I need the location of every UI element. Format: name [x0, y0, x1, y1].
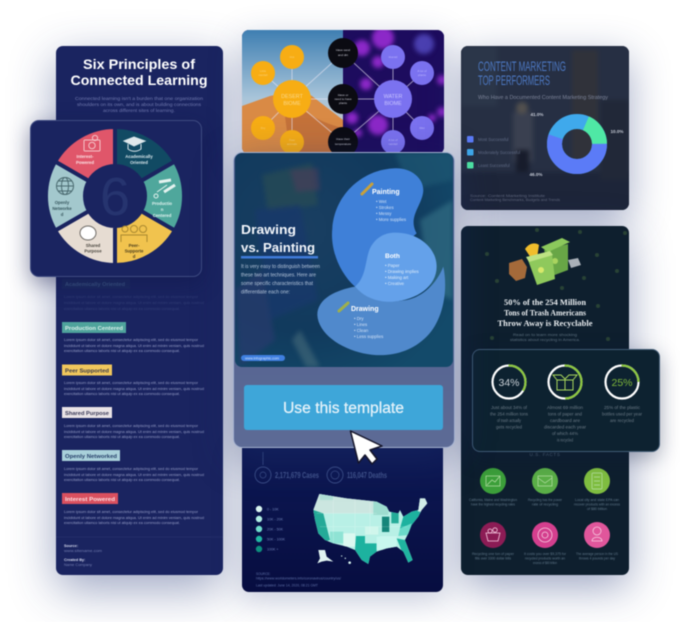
venn shape: painting — [331, 168, 423, 286]
section: shared purpose: Shared Purpose — [65, 411, 109, 417]
stat captions — [490, 404, 642, 442]
stat ring: box icon — [548, 365, 581, 398]
background: paint brushes photo — [234, 152, 452, 366]
panel: template preview with call to action — [233, 152, 455, 448]
yellow item — [525, 243, 539, 258]
stat captions: cardboard are — [550, 418, 580, 422]
diagram: water biome: BIOME — [384, 101, 402, 107]
donut chart — [529, 112, 624, 177]
diagram: shared traits: temperature — [335, 142, 351, 146]
captions: pink facts: Recycling one ton of paper — [472, 552, 515, 556]
background: jellyfish photo — [343, 27, 447, 154]
text block: intro: It is very easy to distinguish between — [240, 264, 320, 270]
text block: painting list: • Messy — [376, 210, 392, 216]
panel: covid map infographic — [242, 440, 443, 592]
metal tray — [568, 258, 581, 268]
segment labels: Academically — [125, 154, 153, 158]
background: desert photo — [242, 30, 343, 154]
source note: https://www.worldometers.info/coronavirus/country/us/ — [256, 576, 341, 580]
decorative recycle marks — [485, 228, 627, 341]
diagram: desert biome: BIOME — [283, 101, 301, 107]
segment icons — [56, 135, 174, 242]
diagram: water biome: A lot of — [388, 138, 398, 142]
icon: mouse cursor — [349, 430, 384, 465]
source note: Source: Content Marketing Institute — [470, 194, 545, 198]
legend — [467, 136, 520, 168]
section: shared purpose: incididunt ut labore et dolore magna aliqua. Ut enim ad minim veniam, quis nostrud — [64, 430, 204, 434]
text block: drawing list: Drawing — [350, 306, 378, 312]
stat captions: Just about 34% of — [490, 404, 527, 410]
heading: content marketing: CONTENT MARKETING — [478, 58, 566, 74]
section: academically oriented: incididunt ut labore et dolore magna aliqua. Ut enim ad minim veniam, quis nostrud — [64, 301, 204, 305]
segment labels: Oriented — [130, 160, 148, 164]
heading: content marketing: TOP PERFORMERS — [478, 72, 550, 88]
captions: pink facts — [472, 552, 619, 565]
text block: painting list — [372, 188, 406, 222]
captions: green facts: Local city and state EPA can — [575, 498, 619, 502]
captions: pink facts: throws 4 pounds per day — [579, 556, 615, 560]
captions: green facts: California, Maine and Washington — [469, 498, 517, 502]
text block: painting list: Painting — [372, 188, 399, 196]
panel: content marketing top performers — [461, 46, 629, 210]
captions: pink facts: excess of $80 billion — [533, 561, 557, 565]
legend: case ranges: 50K - 100K — [267, 538, 286, 542]
donut chart: 41.0% — [530, 112, 544, 117]
stat captions: discarded each year — [544, 424, 586, 429]
stat ring: 25 percent: 25% — [611, 376, 632, 388]
donut chart: 10.0% — [610, 129, 624, 134]
stat captions: 25% of the plastic — [604, 404, 640, 410]
text block: intro: some specific characteristics that — [240, 280, 313, 286]
section: peer supported — [62, 364, 204, 396]
button: use this template — [244, 384, 442, 430]
diagram: water biome: A lot of — [417, 69, 427, 73]
panel: six principles wheel popup — [30, 120, 202, 277]
section: production centered: Production Centered — [65, 326, 123, 332]
text block: painting list: • Wet — [376, 198, 387, 204]
stat captions: the 254 million tons — [490, 411, 528, 416]
stat captions: bottles used per year — [602, 411, 642, 416]
icon row: pink facts — [480, 522, 610, 548]
diagram connectors — [263, 53, 422, 142]
diagram: water biome: WATER — [384, 94, 403, 100]
subtitle: Who Have a Documented Content Marketing Strategy — [478, 95, 608, 101]
segment: openly networked — [45, 161, 88, 230]
diagram: desert biome: Little — [260, 69, 266, 73]
text block: intro — [240, 264, 320, 295]
section: shared purpose: exercitation ullamco laboris nisi ut aliquip ex ea commodo consequat. — [64, 435, 180, 439]
heading: content marketing — [478, 58, 566, 88]
text block: intro — [75, 96, 203, 113]
subtitle: statistics about recycling in America. — [510, 338, 580, 342]
panel: recycling infographic — [461, 226, 629, 575]
source note — [470, 194, 560, 202]
diagram: shared traits: and dirt — [338, 53, 348, 57]
numeral: six: 6 — [99, 166, 130, 226]
source note: Last updated: June 14, 2020, 08:21 GMT — [256, 584, 318, 588]
segment: peer supported — [114, 210, 174, 264]
segment labels: n — [160, 206, 163, 212]
stat: deaths: 116,047 Deaths — [347, 471, 387, 480]
captions: green facts: rate of recycling — [532, 502, 558, 506]
captions: pink facts: It costs you over $9,375 for — [524, 552, 567, 556]
captions: green facts: Recycling has the power — [528, 498, 563, 502]
section: openly networked: incididunt ut labore et dolore magna aliqua. Ut enim ad minim veniam, quis nostrud — [64, 473, 204, 477]
panel: six principles infographic — [56, 46, 223, 575]
stat captions: are recycled — [610, 418, 634, 422]
venn shape: both — [354, 232, 436, 301]
section: interest powered: Interest Powered — [65, 497, 115, 503]
text block: intro: shoulders on its own, and is about building connections — [77, 102, 202, 107]
diagram: water biome: rainfall — [389, 142, 398, 146]
section: interest powered: Lorem ipsum dolor sit amet, consectetur adipiscing elit, sed do eiusmod tempor — [64, 510, 199, 514]
captions: green facts — [469, 498, 620, 511]
stat captions: Almost 69 million — [546, 404, 583, 410]
panel: recycling stats popup — [472, 349, 660, 452]
heading: drawing vs painting — [240, 222, 315, 254]
diagram: shared traits: plants — [339, 101, 347, 105]
diagram: desert biome: rainfall — [259, 73, 268, 77]
text block: both list: • Paper — [384, 262, 400, 268]
text block: both list — [384, 252, 419, 286]
captions: pink facts: fills over 3300 dollar bills — [475, 556, 511, 560]
segment labels: Productio — [151, 200, 172, 206]
section: shared purpose: Lorem ipsum dolor sit amet, consectetur adipiscing elit, sed do eiusmod tempor — [64, 424, 199, 428]
panel: biome comparison — [242, 30, 444, 154]
heading: six principles — [70, 56, 208, 88]
diagram: desert biome: animals — [287, 142, 298, 146]
segment: interest powered — [55, 126, 114, 180]
source note: Content Marketing Benchmarks, Budgets and Trends — [470, 198, 560, 202]
section: production centered — [62, 322, 204, 353]
section: production centered: exercitation ullamco laboris nisi ut aliquip ex ea commodo consequat. — [64, 349, 180, 353]
captions: pink facts: recycled products worth an — [525, 556, 565, 560]
section: academically oriented — [62, 279, 204, 311]
segment labels: Interest- — [76, 154, 94, 158]
segment labels: Openly — [54, 200, 69, 204]
text block: source and credits: www.sitename.com — [64, 549, 102, 553]
text block: drawing list — [350, 306, 384, 338]
diagram: desert biome: Dry — [261, 126, 266, 130]
text block: both list: • Creative — [384, 280, 404, 286]
donut chart: 46.0% — [529, 172, 543, 177]
heading: recycling: 50% of the 254 Million — [504, 297, 586, 307]
segment labels — [52, 154, 172, 258]
section: openly networked — [62, 450, 204, 482]
section: openly networked: Openly Networked — [65, 454, 117, 460]
background: office photo — [455, 40, 635, 215]
text block: intro: Connected learning isn't a burden that one organization — [75, 96, 203, 101]
stat captions: of trash actually — [496, 418, 521, 422]
text block: intro: differentiate each one: — [240, 289, 290, 295]
section: interest powered: incididunt ut labore et dolore magna aliqua. Ut enim ad minim veniam, quis nostrud — [64, 516, 204, 520]
section: peer supported: Peer Supported — [65, 368, 109, 374]
text block: both list: • Making art — [384, 274, 409, 280]
icon row: green facts — [480, 468, 610, 494]
section: academically oriented: Academically Oriented — [65, 282, 125, 288]
wheel chart — [45, 126, 184, 264]
illustration: recycling bins — [509, 238, 581, 285]
heading: six principles: Six Principles of — [83, 56, 195, 72]
segment labels: d — [132, 254, 135, 258]
segment labels: Networke — [52, 206, 72, 210]
segment labels: Peer- — [128, 242, 139, 248]
text block: drawing list: • Clean — [354, 328, 368, 332]
diagram: water biome — [374, 45, 434, 154]
diagram: desert biome: Hot — [290, 55, 294, 59]
text block: drawing list: • Dry — [354, 316, 364, 320]
captions: pink facts: The average person in the US — [576, 552, 619, 556]
stat captions: gets recycled — [496, 424, 522, 429]
stat captions: is recycled — [556, 437, 573, 442]
segment: academically oriented — [114, 126, 174, 180]
section: openly networked: Lorem ipsum dolor sit amet, consectetur adipiscing elit, sed do eiusmod tempor — [64, 467, 199, 471]
section: openly networked: exercitation ullamco laboris nisi ut aliquip ex ea commodo consequat. — [64, 478, 180, 482]
badge: site link — [240, 354, 284, 360]
segment labels: Purpose — [84, 248, 102, 253]
section: peer supported: exercitation ullamco laboris nisi ut aliquip ex ea commodo consequat. — [64, 392, 180, 396]
diagram: shared traits: Have sand — [336, 48, 351, 52]
stat: deaths — [327, 467, 387, 483]
section: interest powered — [62, 493, 204, 525]
stat: cases: 2,171,679 Cases — [275, 471, 319, 480]
legend: case ranges — [256, 506, 286, 552]
captions: green facts: recover products with an excess — [574, 502, 620, 506]
diagram: water biome: Humid — [389, 55, 398, 59]
segment labels: Shared — [85, 242, 100, 248]
heading: drawing vs painting: Drawing — [240, 222, 296, 236]
text block: both list: • Drawing implies — [384, 268, 419, 274]
segment labels: d — [60, 212, 63, 216]
diagram: shared traits: Have or — [338, 93, 348, 97]
subtitle: Read on to learn more shocking — [513, 333, 577, 337]
text block: source and credits: Name Company — [64, 563, 92, 567]
text block: intro: these two art techniques. Here are — [240, 272, 316, 278]
text block: drawing list: • Less supplies — [354, 334, 384, 338]
legend: Most Successful — [478, 137, 509, 142]
stat captions: tons of paper and — [548, 411, 582, 416]
stat ring: 34 percent: 34% — [498, 376, 519, 388]
diagram: desert biome — [251, 45, 311, 154]
legend: case ranges: 20K - 50K — [267, 528, 284, 532]
heading: facts: U.S. FACTS — [529, 452, 561, 457]
section: production centered: incididunt ut labore et dolore magna aliqua. Ut enim ad minim veniam, quis nostrud — [64, 344, 204, 348]
heading: recycling: Throw Away is Recyclable — [498, 318, 593, 328]
diagram: shared traits — [328, 38, 358, 157]
legend: case ranges: 10K - 20K — [267, 518, 284, 522]
captions: green facts: have the highest recycling rates — [471, 502, 515, 506]
badge: site link: www.infographic.com — [244, 356, 278, 360]
stat ring: 25 percent — [605, 365, 638, 398]
icon: pencil — [338, 302, 348, 310]
heading: recycling: Tons of Trash Americans — [504, 308, 587, 318]
legend: case ranges: 0 - 10K — [267, 508, 279, 512]
section: peer supported: Lorem ipsum dolor sit amet, consectetur adipiscing elit, sed do eiusmod tempor — [64, 381, 199, 385]
captions: green facts: of $80 billion — [587, 507, 607, 511]
button: use this template: Use this template — [282, 400, 404, 416]
legend: Moderately Successful — [478, 150, 520, 155]
text block: both list: Both — [384, 252, 399, 260]
front bin — [526, 251, 555, 285]
text block: source and credits — [64, 544, 102, 567]
stat ring: 34 percent — [492, 365, 525, 398]
diagram: desert biome: DESERT — [281, 94, 304, 100]
text block: source and credits: Source: — [64, 544, 78, 548]
section: production centered: Lorem ipsum dolor sit amet, consectetur adipiscing elit, sed do eiusmod tempor — [64, 338, 199, 342]
subtitle — [510, 333, 580, 342]
segment labels: Supporte — [124, 248, 144, 253]
heading: recycling — [498, 297, 593, 328]
diagram: water biome: plants — [418, 73, 426, 77]
choropleth map: united states — [310, 490, 430, 567]
back bin — [541, 238, 570, 276]
segment labels: Powered — [76, 160, 94, 164]
diagram: shared traits: Have their — [336, 137, 350, 141]
segment labels: Centered — [152, 212, 171, 218]
cardboard box — [509, 259, 527, 281]
section: academically oriented: Lorem ipsum dolor sit amet, consectetur adipiscing elit, sed do eiusmod tempor — [64, 295, 199, 299]
text block: painting list: • Strokes — [376, 204, 394, 210]
segment: shared purpose — [55, 210, 114, 264]
heading: drawing vs painting: vs. Painting — [240, 240, 315, 254]
text block: drawing list: • Lines — [354, 322, 368, 326]
text block: painting list: • More supplies — [376, 216, 406, 222]
section: interest powered: exercitation ullamco laboris nisi ut aliquip ex ea commodo consequat. — [64, 521, 180, 525]
section: academically oriented: exercitation ullamco laboris nisi ut aliquip ex ea commodo consequat. — [64, 307, 180, 311]
heading: six principles: Connected Learning — [70, 72, 208, 88]
section: shared purpose — [62, 407, 204, 439]
stat captions: of which 44% — [552, 430, 578, 436]
legend: case ranges: 100K + — [267, 548, 278, 552]
diagram: desert biome: Few — [289, 138, 296, 142]
icon: paint brush — [362, 184, 372, 194]
source note — [256, 572, 341, 588]
diagram: water biome: Wet — [419, 126, 425, 130]
source note: SOURCE: — [256, 572, 271, 576]
section: peer supported: incididunt ut labore et dolore magna aliqua. Ut enim ad minim veniam, quis nostrud — [64, 387, 204, 391]
legend: Least Successful — [478, 163, 510, 168]
text block: source and credits: Created By: — [64, 558, 85, 562]
segment: production centered — [140, 161, 184, 230]
venn shape: drawing — [317, 266, 445, 355]
stat: cases — [255, 452, 319, 483]
text block: intro: across different sites of learning. — [103, 108, 175, 113]
diagram: shared traits: need to have — [334, 97, 352, 101]
